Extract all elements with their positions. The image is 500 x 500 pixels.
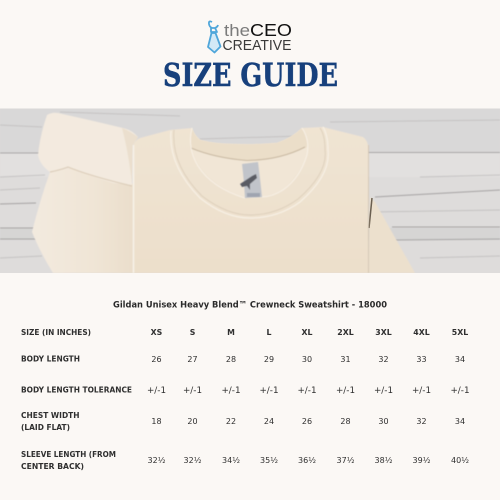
- body length row: 27: [187, 355, 198, 364]
- tolerance row: +/-1: [336, 386, 355, 396]
- tolerance row: +/-1: [183, 386, 202, 396]
- chest width row: 34: [455, 417, 465, 426]
- logo wordmark: the: [224, 21, 250, 40]
- tolerance row: +/-1: [259, 386, 279, 396]
- icon: blue necktie: [208, 21, 220, 52]
- row labels: SIZE (IN INCHES): [21, 328, 91, 337]
- body length row: 28: [226, 355, 236, 364]
- size table: [21, 328, 470, 471]
- neck opening: [190, 128, 308, 198]
- header row sizes: XL: [302, 328, 313, 337]
- header row sizes: 2XL: [337, 328, 354, 337]
- chest width row: [151, 417, 465, 426]
- sleeve length row: 32½: [148, 456, 166, 465]
- row labels: BODY LENGTH: [21, 354, 80, 364]
- header row sizes: XS: [151, 328, 163, 337]
- tolerance row: +/-1: [450, 386, 470, 396]
- logo: theCEO Creative: CEO: [250, 20, 292, 40]
- chest width row: 28: [340, 417, 351, 426]
- lower sleeve: [32, 167, 134, 273]
- sweatshirt body: [133, 127, 368, 273]
- body length row: 26: [151, 355, 162, 364]
- body length row: [151, 355, 465, 364]
- sleeve length row: 34½: [222, 456, 240, 465]
- body length row: 30: [302, 355, 312, 364]
- table heading: Gildan Unisex Heavy Blend™ Crewneck Sweatshirt - 18000: [113, 300, 387, 310]
- sleeve length row: 35½: [260, 456, 278, 465]
- sleeve shadow: [369, 198, 372, 228]
- photo: sweatshirt on wood planks: [0, 108, 500, 273]
- row labels: [21, 328, 132, 471]
- garment tag: [240, 162, 262, 198]
- tolerance row: +/-1: [297, 386, 317, 396]
- row labels: BODY LENGTH TOLERANCE: [21, 386, 132, 394]
- header row sizes: 5XL: [452, 328, 468, 337]
- tolerance row: +/-1: [412, 386, 431, 396]
- header row sizes: M: [227, 328, 235, 337]
- header row sizes: S: [190, 328, 196, 337]
- row labels: CHEST WIDTH: [21, 411, 80, 420]
- sleeve length row: 36½: [298, 456, 316, 465]
- header row sizes: 4XL: [413, 328, 430, 337]
- body length row: 31: [340, 355, 351, 364]
- row labels: (LAID FLAT): [21, 423, 70, 432]
- header row sizes: 3XL: [375, 328, 392, 337]
- sleeve length row: 37½: [337, 456, 355, 465]
- body length row: 29: [264, 355, 274, 364]
- body length row: 33: [416, 355, 427, 364]
- chest width row: 30: [378, 417, 389, 426]
- tolerance row: +/-1: [221, 386, 241, 396]
- right sleeve: [368, 197, 415, 273]
- chest width row: 18: [151, 417, 162, 426]
- sleeve length row: 32½: [184, 456, 202, 465]
- tolerance row: [147, 386, 470, 396]
- sleeve length row: 38½: [375, 456, 393, 465]
- chest width row: 20: [187, 417, 198, 426]
- chest width row: 24: [264, 417, 274, 426]
- tolerance row: +/-1: [147, 386, 166, 396]
- sleeve length row: 40½: [451, 456, 469, 465]
- wood background: [0, 108, 500, 273]
- sleeve length row: 39½: [413, 456, 431, 465]
- logo: theCEO Creative: [208, 20, 292, 54]
- chest width row: 22: [226, 417, 236, 426]
- logo: theCEO Creative: CREATIVE: [222, 38, 292, 54]
- body length row: 32: [378, 355, 389, 364]
- folded cuff: [38, 113, 138, 186]
- row labels: CENTER BACK): [21, 462, 84, 471]
- chest width row: 32: [416, 417, 427, 426]
- chest width row: 26: [302, 417, 312, 426]
- body length row: 34: [455, 355, 465, 364]
- collar ring: [171, 127, 328, 218]
- header row sizes: L: [267, 328, 272, 337]
- title: SIZE GUIDE: [163, 56, 338, 94]
- row labels: SLEEVE LENGTH (FROM: [21, 450, 116, 459]
- header row sizes: [151, 328, 468, 337]
- sleeve length row: [148, 456, 469, 465]
- tolerance row: +/-1: [374, 386, 393, 396]
